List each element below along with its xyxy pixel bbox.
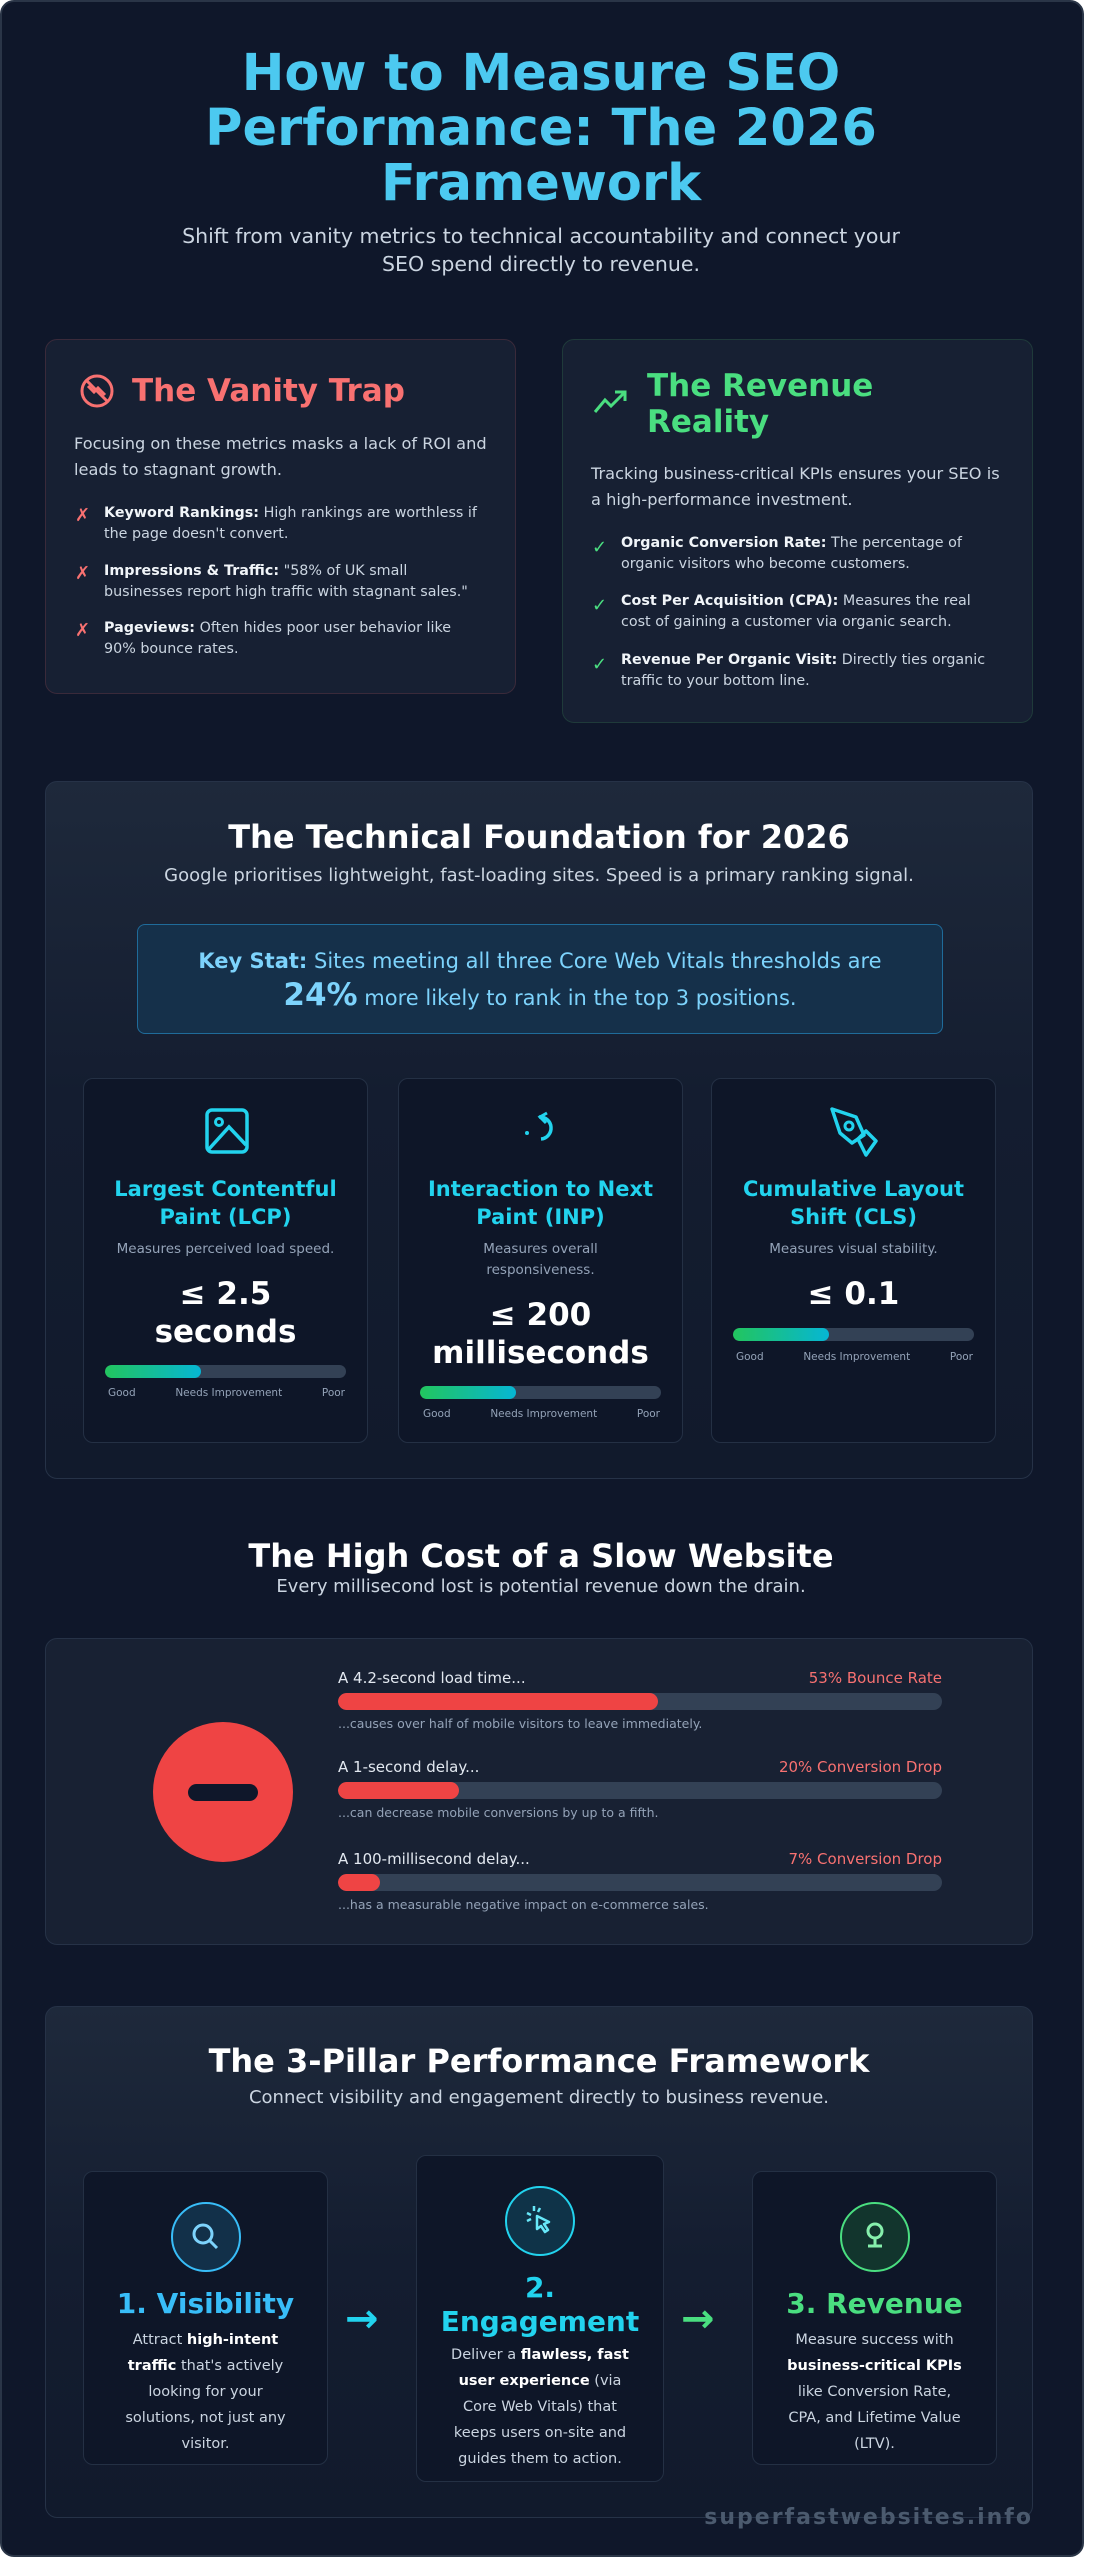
title: Performance: The 2026 bbox=[205, 99, 877, 158]
panel: vanity trap bbox=[45, 339, 516, 694]
stat row: 100 ms: A 100-millisecond delay... bbox=[338, 1850, 530, 1868]
icon: trending up bbox=[594, 390, 626, 413]
heading: slow website: The High Cost of a Slow Website bbox=[248, 1537, 834, 1575]
arrow 1: → bbox=[345, 2296, 379, 2342]
heading: The Technical Foundation for 2026 bbox=[228, 818, 850, 856]
card: INP: Measures overall bbox=[483, 1241, 598, 1257]
icon: stop sign bbox=[153, 1722, 293, 1862]
card: INP: Good bbox=[423, 1408, 451, 1420]
heading bbox=[647, 368, 873, 440]
card: INP: Interaction to Next bbox=[428, 1177, 653, 1201]
card: INP: Paint (INP) bbox=[476, 1205, 605, 1229]
card: LCP bbox=[83, 1078, 368, 1443]
card: CLS: Shift (CLS) bbox=[790, 1205, 917, 1229]
panel: slow website stats bbox=[45, 1638, 1033, 1945]
icon: click bbox=[505, 2186, 575, 2256]
pillar: revenue: 3. Revenue bbox=[786, 2287, 963, 2320]
card: INP: responsiveness. bbox=[486, 1262, 595, 1278]
list: revenue KPIs: Revenue Per Organic Visit: Directly ties organic traffic to your bottom line. bbox=[621, 652, 985, 689]
card: LCP: seconds bbox=[155, 1314, 296, 1350]
list: revenue KPIs: Cost Per Acquisition (CPA): Measures the real cost of gaining a customer via organic search. bbox=[621, 593, 971, 630]
pillar: visibility: Attract high-intent traffic that's actively looking for your solutions, not just any visitor. bbox=[125, 2332, 286, 2452]
stat row: 4.2 second: 53% Bounce Rate bbox=[809, 1669, 942, 1687]
card: LCP: Needs Improvement bbox=[175, 1387, 282, 1399]
card: LCP: Good bbox=[108, 1387, 136, 1399]
card: CLS: Cumulative Layout bbox=[743, 1177, 964, 1201]
subtitle: Shift from vanity metrics to technical accountability and connect your bbox=[182, 224, 900, 248]
pillar: engagement: 2. bbox=[525, 2271, 555, 2304]
card: CLS: Needs Improvement bbox=[803, 1351, 910, 1363]
panel: revenue reality bbox=[562, 339, 1033, 723]
pillar: revenue: Measure success with business-critical KPIs like Conversion Rate, CPA, and Lifetime Value (LTV). bbox=[787, 2332, 962, 2452]
arrow 2: → bbox=[681, 2296, 715, 2342]
watermark: superfastwebsites.info bbox=[704, 2505, 1033, 2530]
card: LCP: ≤ 2.5 bbox=[180, 1276, 271, 1312]
panel: technical foundation bbox=[45, 781, 1033, 1479]
list: vanity metrics: ✗ bbox=[75, 505, 90, 526]
subheading: Connect visibility and engagement directly to business revenue. bbox=[249, 2087, 829, 2108]
stat row: 100 ms bbox=[338, 1850, 942, 1912]
subheading: Google prioritises lightweight, fast-loading sites. Speed is a primary ranking signal. bbox=[164, 865, 914, 886]
card: LCP: Paint (LCP) bbox=[160, 1205, 291, 1229]
subtitle bbox=[182, 224, 900, 276]
stat row: 1 second bbox=[338, 1758, 942, 1820]
list: vanity metrics: ✗ bbox=[75, 620, 90, 641]
description: Tracking business-critical KPIs ensures your SEO is a high-performance investment. bbox=[591, 464, 1000, 509]
card: INP: Needs Improvement bbox=[490, 1408, 597, 1420]
title: How to Measure SEO bbox=[242, 44, 840, 103]
card: INP: ≤ 200 bbox=[490, 1297, 591, 1333]
stat row: 1 second: 20% Conversion Drop bbox=[779, 1758, 942, 1776]
heading: The 3-Pillar Performance Framework bbox=[209, 2042, 869, 2080]
list: revenue KPIs: Organic Conversion Rate: The percentage of organic visitors who become customers. bbox=[621, 535, 962, 572]
title bbox=[205, 44, 877, 213]
list: revenue KPIs: ✓ bbox=[592, 537, 607, 558]
list: revenue KPIs: ✓ bbox=[592, 654, 607, 675]
list: vanity metrics: ✗ bbox=[75, 563, 90, 584]
list: revenue KPIs bbox=[592, 535, 985, 689]
card: LCP: Measures perceived load speed. bbox=[117, 1241, 334, 1257]
card: CLS bbox=[711, 1078, 996, 1443]
card: LCP: Largest Contentful bbox=[114, 1177, 337, 1201]
card: CLS: Poor bbox=[950, 1351, 973, 1363]
list: vanity metrics: Keyword Rankings: High rankings are worthless if the page doesn't convert. bbox=[104, 505, 477, 542]
stat row: 100 ms: 7% Conversion Drop bbox=[788, 1850, 942, 1868]
stat row: 1 second: ...can decrease mobile conversions by up to a fifth. bbox=[338, 1805, 658, 1820]
icon: target bbox=[840, 2202, 910, 2272]
card: CLS: Measures visual stability. bbox=[769, 1241, 938, 1257]
list: vanity metrics: Pageviews: Often hides poor user behavior like 90% bounce rates. bbox=[104, 620, 451, 657]
description: Focusing on these metrics masks a lack of ROI and leads to stagnant growth. bbox=[74, 434, 487, 479]
icon: search bbox=[170, 2202, 240, 2272]
heading: The Revenue bbox=[647, 368, 873, 404]
card: CLS: ≤ 0.1 bbox=[808, 1276, 899, 1312]
icon: vanity (no chart) bbox=[80, 374, 114, 408]
pillar: revenue bbox=[752, 2171, 997, 2465]
subtitle: SEO spend directly to revenue. bbox=[382, 252, 700, 276]
heading: Reality bbox=[647, 404, 769, 440]
pillar: visibility bbox=[83, 2171, 328, 2465]
card: CLS: Good bbox=[736, 1351, 764, 1363]
stat row: 4.2 second bbox=[338, 1669, 942, 1731]
callout: key stat: 24% more likely to rank in the top 3 positions. bbox=[283, 977, 797, 1013]
pillar: engagement: Engagement bbox=[441, 2305, 639, 2338]
card: INP bbox=[398, 1078, 683, 1443]
card: INP: milliseconds bbox=[432, 1335, 649, 1371]
list: vanity metrics bbox=[75, 505, 478, 657]
icon: image bbox=[205, 1108, 249, 1154]
heading: The Vanity Trap bbox=[132, 373, 405, 409]
callout: key stat: Key Stat: Sites meeting all three Core Web Vitals thresholds are bbox=[198, 949, 882, 973]
stat row: 4.2 second: A 4.2-second load time... bbox=[338, 1669, 526, 1687]
panel: 3-pillar framework bbox=[45, 2006, 1033, 2518]
pillar: visibility: 1. Visibility bbox=[117, 2287, 294, 2320]
stat row: 100 ms: ...has a measurable negative impact on e-commerce sales. bbox=[338, 1897, 709, 1912]
subheading: slow website: Every millisecond lost is potential revenue down the drain. bbox=[276, 1576, 806, 1597]
card: LCP: Poor bbox=[322, 1387, 345, 1399]
pillar: engagement: Deliver a flawless, fast user experience (via Core Web Vitals) that keeps users on-site and guides them to action. bbox=[451, 2347, 629, 2467]
list: revenue KPIs: ✓ bbox=[592, 595, 607, 616]
pillar: engagement bbox=[416, 2155, 664, 2482]
icon: rotate pointer bbox=[525, 1112, 553, 1141]
callout: key stat bbox=[137, 924, 943, 1034]
title: Framework bbox=[381, 154, 701, 213]
icon: pen tool bbox=[830, 1107, 878, 1157]
card: INP: Poor bbox=[637, 1408, 660, 1420]
stat row: 1 second: A 1-second delay... bbox=[338, 1758, 479, 1776]
list: vanity metrics: Impressions & Traffic: "58% of UK small businesses report high traffic with stagnant sales." bbox=[104, 563, 468, 600]
stat row: 4.2 second: ...causes over half of mobile visitors to leave immediately. bbox=[338, 1716, 702, 1731]
